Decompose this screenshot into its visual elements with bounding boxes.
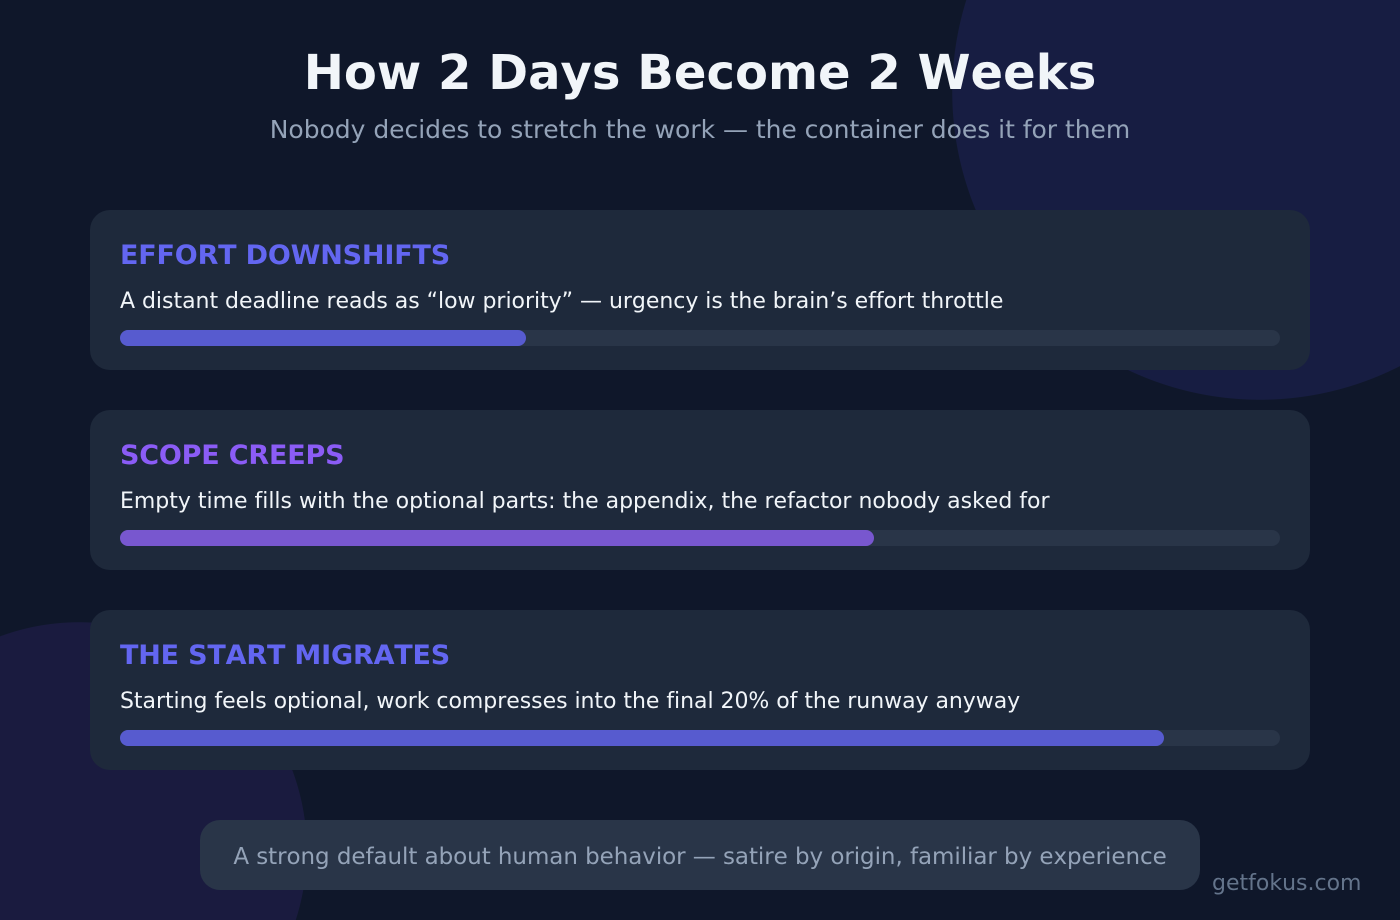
heading: the start migrates: THE START MIGRATES [120, 640, 450, 671]
watermark: getfokus.com [1212, 871, 1361, 896]
decorative circle: bottom left [0, 622, 307, 920]
text: scope description: Empty time fills with the optional parts: the appendix, the refactor nobody asked for [120, 489, 1049, 514]
heading: scope creeps: SCOPE CREEPS [120, 440, 344, 471]
text: start description: Starting feels optional, work compresses into the final 20% of the runway anyway [120, 689, 1020, 714]
subtitle: Nobody decides to stretch the work — the container does it for them [270, 115, 1130, 144]
callout text: A strong default about human behavior — satire by origin, familiar by experience [233, 844, 1167, 870]
panel: the start migrates [90, 610, 1310, 770]
progress bar: scope [120, 530, 1280, 546]
title: How 2 Days Become 2 Weeks [304, 45, 1096, 101]
text: effort description: A distant deadline reads as “low priority” — urgency is the brain’s effort throttle [120, 289, 1003, 314]
panel: effort downshifts [90, 210, 1310, 370]
heading: effort downshifts: EFFORT DOWNSHIFTS [120, 240, 450, 271]
panel: scope creeps [90, 410, 1310, 570]
progress bar: start [120, 730, 1280, 746]
decorative circle: top right [952, 0, 1400, 400]
progress bar: effort [120, 330, 1280, 346]
callout [200, 820, 1200, 890]
